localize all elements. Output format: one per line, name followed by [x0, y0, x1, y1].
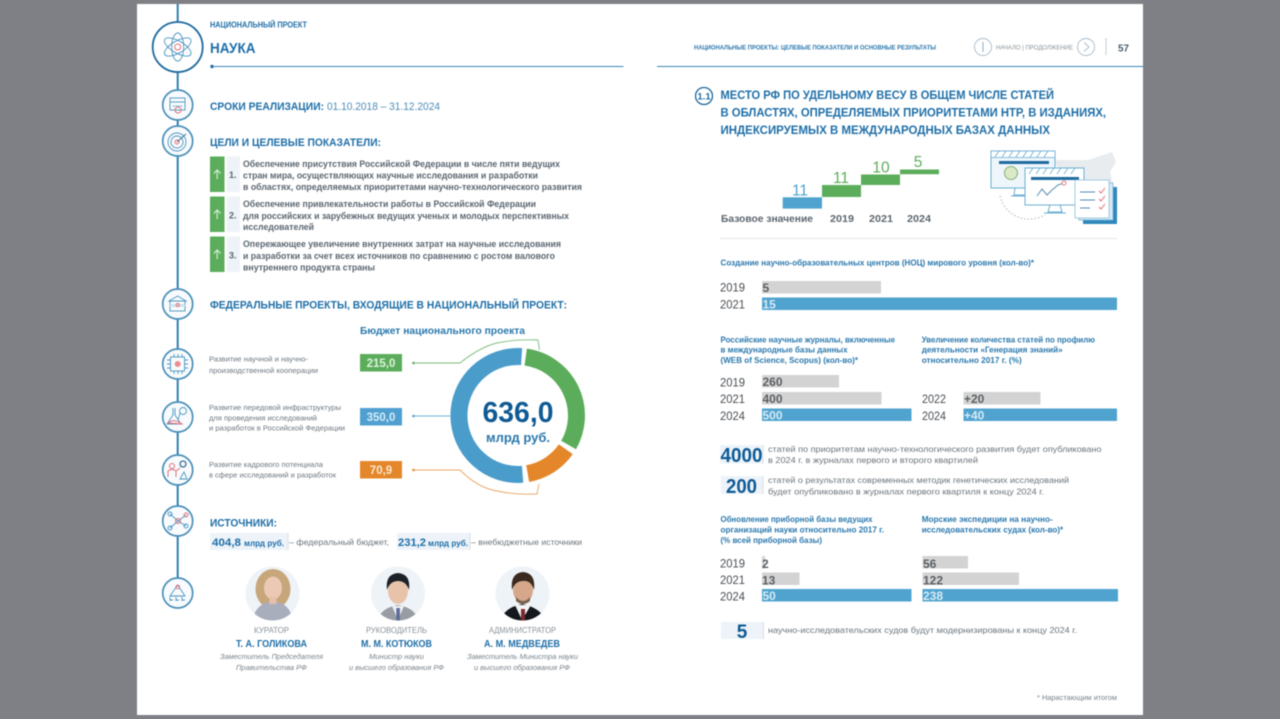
- step chart: 11: [833, 170, 849, 187]
- bar chart: journals: 2019: [720, 376, 745, 390]
- footnote: * Нарастающим итогом: [1037, 695, 1117, 702]
- sources: – федеральный бюджет,: [289, 537, 389, 547]
- icon: target: [163, 126, 193, 156]
- bar chart: instrument base: организаций науки относительно 2017 г.: [720, 524, 884, 534]
- person: head: М. М. КОТЮКОВ: [361, 639, 432, 650]
- bar chart: journals: [720, 334, 912, 423]
- bar chart: instrument base: 2024: [720, 590, 745, 604]
- person: administrator: Заместитель Министра науки: [467, 652, 579, 661]
- white page: [137, 4, 1143, 715]
- bar chart: instrument base: 2: [762, 557, 769, 571]
- budget value boxes: 70,9: [370, 465, 392, 477]
- bar chart: articles growth: +20: [964, 392, 985, 406]
- sources: – внебюджетные источники: [471, 537, 582, 547]
- bar chart: journals: 400: [762, 392, 783, 406]
- sources: 231,2: [398, 537, 426, 549]
- person: curator: Т. А. ГОЛИКОВА: [236, 639, 307, 650]
- person: curator: Правительства РФ: [236, 663, 307, 672]
- project labels: в сфере исследований и разработок: [209, 470, 337, 480]
- step chart: [721, 154, 939, 225]
- goal 3: внутреннего продукта страны: [243, 262, 375, 272]
- divider: [720, 238, 1117, 240]
- stat: 200 articles: [721, 475, 1069, 498]
- heading: indicator 1.1: 1.1: [697, 92, 711, 102]
- portrait: Kotyukov: [371, 566, 426, 622]
- icon: network: [163, 506, 193, 536]
- right page header: 57: [1118, 42, 1129, 54]
- icon: researcher with gear: [163, 455, 193, 485]
- bar chart: articles growth: +40: [964, 408, 985, 422]
- heading: national project: [210, 20, 624, 68]
- bar chart: journals: 2024: [720, 409, 745, 423]
- person: head: Министр науки: [369, 652, 425, 661]
- bar chart: sea expeditions: 56: [923, 557, 937, 571]
- person: administrator: А. М. МЕДВЕДЕВ: [484, 639, 560, 650]
- bar chart: research centres: Создание научно-образовательных центров (НОЦ) мирового уровня (кол-во)*: [720, 258, 1035, 268]
- icon: calendar: [163, 90, 193, 120]
- heading: indicator 1.1: ИНДЕКСИРУЕМЫХ В МЕЖДУНАРОДНЫХ БАЗАХ ДАННЫХ: [720, 125, 1050, 137]
- heading: indicator 1.1: В ОБЛАСТЯХ, ОПРЕДЕЛЯЕМЫХ ПРИОРИТЕТАМИ НТР, В ИЗДАНИЯХ,: [720, 108, 1106, 120]
- sources: [210, 518, 582, 550]
- right page header: НАЧАЛО | ПРОДОЛЖЕНИЕ: [996, 44, 1074, 52]
- goal 1: Обеспечение присутствия Российской Федерации в числе пяти ведущих: [243, 159, 560, 169]
- bar chart: research centres: 2021: [720, 298, 745, 312]
- heading: federal projects: ФЕДЕРАЛЬНЫЕ ПРОЕКТЫ, ВХОДЯЩИЕ В НАЦИОНАЛЬНЫЙ ПРОЕКТ:: [210, 298, 567, 312]
- heading: goals: ЦЕЛИ И ЦЕЛЕВЫЕ ПОКАЗАТЕЛИ:: [210, 137, 381, 149]
- bar chart: articles growth: 2024: [922, 409, 946, 423]
- goal 2: исследователей: [243, 222, 314, 232]
- right page header: [657, 38, 1143, 66]
- step chart: 2019: [830, 213, 854, 225]
- stat: 5 research vessels: научно-исследовательских судов будут модернизированы к концу 2024 г.: [768, 625, 1077, 635]
- step chart: 10: [872, 160, 890, 176]
- implementation dates: [210, 101, 440, 113]
- goal 1: в областях, определяемых приоритетами научно-технологического развития: [243, 182, 582, 192]
- sources: млрд руб.: [244, 539, 284, 548]
- budget value boxes: 350,0: [367, 412, 395, 424]
- bar chart: journals: Российские научные журналы, включенные: [720, 334, 895, 344]
- project labels: Развитие научной и научно-: [209, 354, 309, 364]
- heading: national project: НАЦИОНАЛЬНЫЙ ПРОЕКТ: [210, 20, 307, 30]
- bar chart: articles growth: 2022: [922, 392, 946, 406]
- goal 2: Обеспечение привлекательности работы в Российской Федерации: [243, 199, 536, 209]
- bar chart: sea expeditions: 238: [923, 589, 943, 603]
- heading: national project: НАУКА: [210, 41, 256, 57]
- icon: hierarchy: [163, 578, 193, 608]
- goal 2: для российских и зарубежных ведущих ученых и молодых перспективных: [243, 211, 569, 221]
- stat: 200 articles: 200: [726, 476, 757, 498]
- person: administrator: АДМИНИСТРАТОР: [489, 626, 556, 635]
- bar chart: instrument base: 50: [762, 589, 776, 603]
- bar chart: instrument base: 2019: [720, 556, 745, 570]
- bar chart: sea expeditions: 122: [923, 574, 943, 588]
- bar chart: journals: 2021: [720, 392, 745, 406]
- person: curator: [220, 566, 323, 672]
- bar chart: journals: (WEB of Science, Scopus) (кол-во)*: [720, 355, 859, 365]
- illustration: monitors and map: [991, 151, 1117, 224]
- step chart: 11: [792, 182, 808, 200]
- goal 2: [210, 196, 569, 232]
- person: head: [349, 566, 444, 672]
- project labels: для проведения исследований: [209, 414, 317, 422]
- bar chart: research centres: 2019: [720, 280, 745, 294]
- project labels: [209, 354, 345, 480]
- person: administrator: и высшего образования РФ: [474, 663, 570, 672]
- budget value boxes: 215,0: [367, 358, 395, 370]
- project labels: Развитие кадрового потенциала: [209, 460, 324, 469]
- goal 3: 3.: [229, 250, 237, 260]
- stat: 5 research vessels: 5: [737, 622, 748, 643]
- goal 2: 2.: [229, 210, 237, 220]
- goals list: [210, 156, 582, 272]
- step chart: 5: [914, 154, 922, 171]
- bar chart: instrument base: 2021: [720, 573, 745, 587]
- icon: institution building: [163, 289, 193, 319]
- bar chart: instrument base: (% всей приборной базы): [720, 535, 822, 545]
- person: head: РУКОВОДИТЕЛЬ: [366, 626, 427, 635]
- step chart: 2021: [869, 213, 893, 225]
- bar chart: research centres: 15: [762, 298, 776, 312]
- bar chart: instrument base: Обновление приборной базы ведущих: [720, 514, 873, 524]
- stat: 200 articles: будет опубликовано в журналах первого квартиля к концу 2024 г.: [768, 486, 1044, 496]
- person: curator: Заместитель Председателя: [220, 652, 323, 661]
- person: administrator: [467, 566, 579, 672]
- person: curator: КУРАТОР: [254, 626, 289, 635]
- implementation dates: СРОКИ РЕАЛИЗАЦИИ:: [210, 101, 324, 113]
- sources: млрд руб.: [428, 539, 468, 548]
- budget title: Бюджет национального проекта: [360, 325, 525, 337]
- sources: ИСТОЧНИКИ:: [210, 518, 277, 530]
- step chart: 2024: [907, 213, 931, 225]
- bar chart: instrument base: 13: [762, 574, 776, 588]
- bar chart: articles growth: [922, 334, 1117, 423]
- stat: 4000 articles: статей по приоритетам научно-технологического развития будет опубликовано: [768, 444, 1102, 454]
- bar chart: sea expeditions: [922, 514, 1118, 603]
- leader lines: [412, 340, 540, 494]
- implementation dates: 01.10.2018 – 31.12.2024: [327, 101, 440, 113]
- bar chart: journals: в международные базы данных: [720, 344, 848, 354]
- stat: 200 articles: статей о результатах современных методик генетических исследований: [768, 475, 1069, 485]
- icon: atom: [153, 22, 203, 72]
- donut chart: [459, 356, 576, 474]
- right page header: НАЦИОНАЛЬНЫЕ ПРОЕКТЫ: ЦЕЛЕВЫЕ ПОКАЗАТЕЛИ И ОСНОВНЫЕ РЕЗУЛЬТАТЫ: [694, 44, 936, 52]
- bar chart: articles growth: относительно 2017 г. (%): [922, 355, 1022, 365]
- goal 1: 1.: [229, 170, 237, 180]
- heading: indicator 1.1: МЕСТО РФ ПО УДЕЛЬНОМУ ВЕСУ В ОБЩЕМ ЧИСЛЕ СТАТЕЙ: [720, 89, 1054, 102]
- person: head: и высшего образования РФ: [349, 663, 444, 672]
- portrait: Medvedev: [495, 566, 550, 622]
- bar chart: articles growth: деятельности «Генерация знаний»: [922, 344, 1063, 354]
- stat: 5 research vessels: [721, 622, 1077, 643]
- portrait: Golikova: [245, 566, 300, 622]
- step chart: Базовое значение: [721, 213, 813, 225]
- stat: 4000 articles: 4000: [720, 445, 762, 467]
- timeline with section icons: [153, 4, 203, 608]
- budget value boxes: [360, 354, 402, 478]
- sources: 404,8: [212, 537, 241, 549]
- project labels: производственной кооперации: [209, 366, 318, 375]
- goal 3: и разработки за счет всех источников по сравнению с ростом валового: [243, 251, 555, 261]
- stat: 4000 articles: в 2024 г. в журналах первого и второго квартилей: [768, 455, 978, 465]
- bar chart: research centres: [720, 258, 1117, 312]
- bar chart: journals: 260: [762, 375, 783, 389]
- icon: lab flask: [163, 402, 193, 432]
- bar chart: research centres: 5: [762, 281, 770, 295]
- bar chart: sea expeditions: Морские экспедиции на научно-: [922, 514, 1053, 524]
- project labels: и разработок в Российской Федерации: [209, 424, 345, 432]
- goal 1: стран мира, осуществляющих научные исследования и разработки: [243, 170, 538, 180]
- project labels: Развитие передовой инфраструктуры: [209, 403, 341, 412]
- bar chart: instrument base: [720, 514, 912, 604]
- donut chart: млрд руб.: [486, 430, 550, 445]
- goal 3: [210, 236, 561, 272]
- goal 3: Опережающее увеличение внутренних затрат на научные исследования: [243, 239, 561, 249]
- heading: indicator 1.1: [696, 88, 1106, 137]
- stat: 4000 articles: [720, 444, 1102, 467]
- donut chart: 636,0: [482, 397, 554, 429]
- bar chart: journals: 500: [762, 408, 783, 422]
- bar chart: sea expeditions: исследовательских судах (кол-во)*: [922, 524, 1064, 534]
- bar chart: articles growth: Увеличение количества статей по профилю: [922, 334, 1095, 344]
- icon: microchip: [163, 349, 193, 379]
- goal 1: [210, 156, 582, 192]
